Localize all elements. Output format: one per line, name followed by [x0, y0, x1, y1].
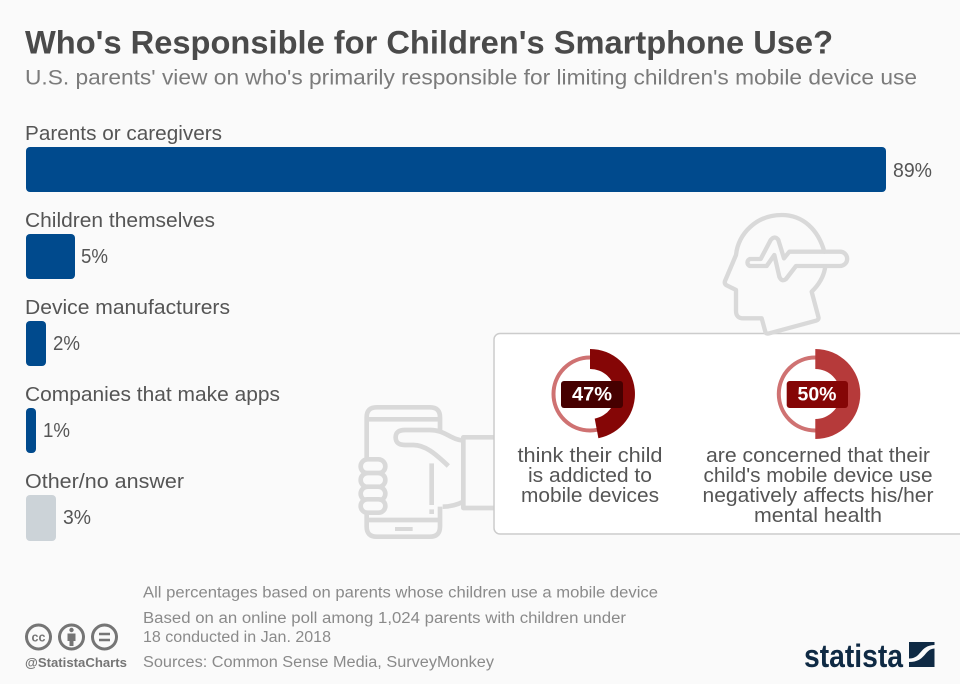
bar row: companies that make apps: 1%	[43, 420, 70, 442]
icon: creative commons licence	[26, 625, 116, 649]
footnotes: Sources: Common Sense Media, SurveyMonkey	[143, 654, 494, 671]
donut: 50 percent: 50%	[798, 384, 836, 406]
bar row: children themselves	[25, 209, 215, 279]
bar row: parents or caregivers: Parents or caregivers	[25, 122, 222, 145]
footnotes: 18 conducted in Jan. 2018	[143, 629, 331, 646]
panel: parent concerns	[494, 334, 960, 534]
bar row: children themselves: Children themselves	[25, 209, 215, 232]
bar row: companies that make apps: Companies that make apps	[25, 383, 280, 406]
bar row: parents or caregivers	[25, 122, 932, 192]
text: addicted statistic: is addicted to	[528, 464, 652, 487]
social handle: @StatistaCharts	[25, 656, 127, 670]
footnotes: All percentages based on parents whose children use a mobile device	[143, 584, 658, 602]
text: addicted statistic: think their child	[518, 444, 662, 467]
text: mental health statistic: child's mobile device use	[704, 464, 932, 487]
icon: creative commons licence: cc	[32, 630, 45, 644]
bar row: parents or caregivers: 89%	[893, 160, 932, 182]
bar row: children themselves: 5%	[81, 246, 108, 268]
footnotes	[143, 584, 658, 671]
text: mental health statistic: mental health	[754, 504, 882, 527]
bar row: companies that make apps	[25, 383, 280, 453]
bar row: device manufacturers: Device manufacturers	[25, 296, 230, 319]
bar row: other or no answer	[25, 470, 184, 541]
bar row: device manufacturers: 2%	[53, 333, 80, 355]
donut: 47 percent: 47%	[572, 384, 612, 406]
bar row: other or no answer: Other/no answer	[25, 470, 184, 493]
donut: 47 percent	[554, 349, 635, 438]
bar chart	[25, 122, 932, 541]
subtitle: U.S. parents' view on who's primarily responsible for limiting children's mobile device use	[25, 66, 917, 90]
icon: head with pulse line	[725, 215, 847, 334]
text: addicted statistic	[518, 444, 662, 507]
title: Who's Responsible for Children's Smartphone Use?	[25, 24, 833, 60]
text: mental health statistic: are concerned that their	[706, 444, 930, 467]
bar row: other or no answer: 3%	[63, 507, 91, 529]
donut: 50 percent	[779, 349, 860, 439]
bar row: device manufacturers	[25, 296, 230, 366]
icon: statista logo	[909, 642, 934, 667]
text: addicted statistic: mobile devices	[521, 484, 659, 507]
text: mental health statistic	[702, 444, 934, 527]
icon: hand holding smartphone	[361, 407, 500, 537]
footnotes: Based on an online poll among 1,024 parents with children under	[143, 610, 626, 627]
text: mental health statistic: negatively affects his/her	[702, 484, 934, 507]
statista wordmark: statista	[804, 638, 903, 674]
